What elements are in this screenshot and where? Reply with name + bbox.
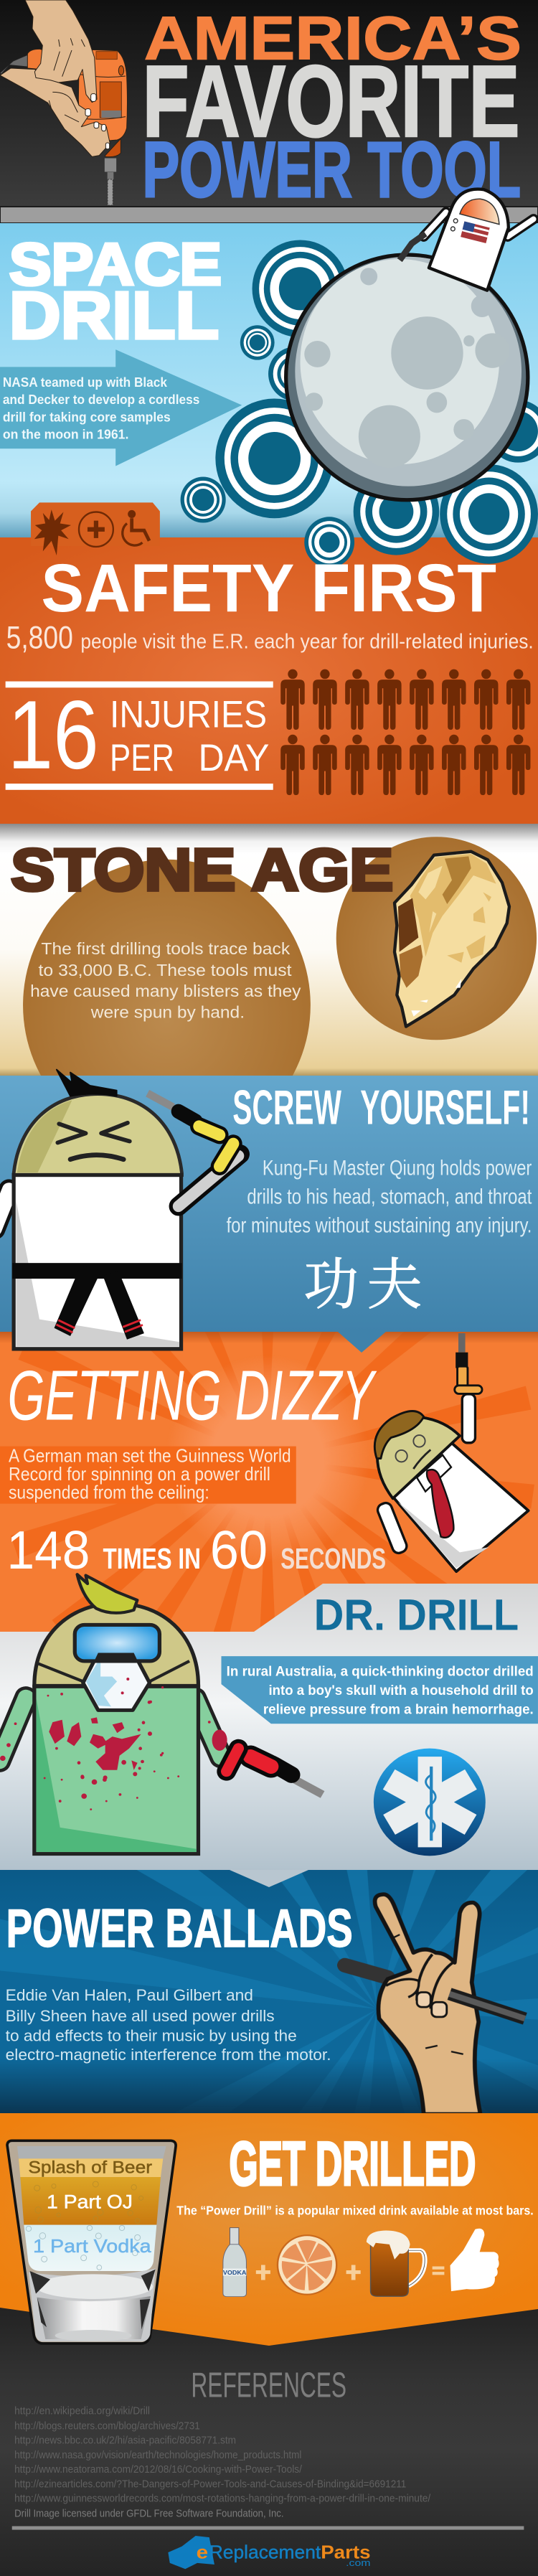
- references: http://blogs.reuters.com/blog/archives/2731: [14, 2420, 200, 2432]
- references: [12, 2366, 524, 2530]
- screw yourself text: 夫: [367, 1240, 422, 1320]
- logo: eReplacementParts: Replacement: [209, 2542, 321, 2562]
- pointer into power ballads: [230, 1870, 308, 1887]
- arrow with NASA text: NASA teamed up with Black: [3, 375, 168, 390]
- getting dizzy text: A German man set the Guinness World: [9, 1444, 291, 1466]
- power ballads text: Eddie Van Halen, Paul Gilbert and: [6, 1986, 253, 2004]
- icon: wheelchair: [123, 512, 149, 545]
- logo: eReplacementParts: Parts: [321, 2542, 371, 2562]
- red drill: [227, 1749, 323, 1795]
- screw yourself text: [227, 1081, 532, 1320]
- callout: dr drill text: [222, 1656, 538, 1724]
- safety first text and stats: 16: [8, 680, 99, 789]
- panel: header background: [0, 0, 538, 207]
- arrow with NASA text: [0, 349, 242, 466]
- references: http://www.nasa.gov/vision/earth/technologies/home_products.html: [14, 2449, 301, 2461]
- dr drill heading: DR. DRILL: [314, 1590, 519, 1640]
- illustration: shot glass recipe: [7, 2140, 176, 2344]
- illustration: rock hand holding drill bit: [345, 1894, 525, 2114]
- getting dizzy text: Record for spinning on a power drill: [9, 1463, 270, 1485]
- getting dizzy text: suspended from the ceiling:: [9, 1481, 209, 1503]
- icon: plus: [346, 2265, 361, 2280]
- panel: safety first background: [0, 537, 538, 824]
- heading: space drill: DRILL: [9, 278, 219, 353]
- illustration: spinning man: [374, 1333, 529, 1571]
- icon: star of life: [374, 1749, 486, 1856]
- logo: eReplacementParts: e: [197, 2542, 208, 2562]
- illustration: shot glass recipe: Splash of Beer: [28, 2158, 152, 2177]
- illustration: shot glass recipe: 1 Part OJ: [47, 2191, 133, 2213]
- panel: dr. drill background: [0, 1584, 538, 1870]
- icon: starburst: [34, 509, 71, 555]
- icon: plus in circle: [79, 512, 113, 547]
- illustration: moon: [284, 253, 529, 502]
- screw yourself text: 功: [303, 1240, 359, 1320]
- icon: hands holding orange drill: [0, 0, 127, 205]
- heading: space drill: [9, 232, 222, 353]
- big brown circle: [23, 860, 311, 1076]
- logo: eReplacementParts: .com: [346, 2558, 371, 2568]
- safety first text and stats: INJURIES: [110, 693, 267, 736]
- references: Drill Image licensed under GFDL Free Software Foundation, Inc.: [14, 2507, 284, 2519]
- safety first text and stats: [6, 550, 534, 790]
- panel: screw yourself background: [0, 1076, 538, 1353]
- references: REFERENCES: [191, 2366, 346, 2405]
- panel: get drilled background: [0, 2113, 538, 2346]
- blood splatter: [0, 1678, 227, 1810]
- getting dizzy text: 148: [7, 1520, 90, 1580]
- get drilled text: [176, 2128, 534, 2218]
- icon: equals: [433, 2268, 444, 2273]
- pointer: [338, 1332, 386, 1353]
- heading: space drill: SPACE: [9, 232, 222, 298]
- references: http://www.guinnessworldrecords.com/most-rotations-hanging-from-a-power-drill-in-one-minute/: [14, 2492, 431, 2504]
- power ballads text: to add effects to their music by using the: [6, 2027, 297, 2044]
- arrow with NASA text: on the moon in 1961.: [3, 427, 128, 442]
- grey band: [0, 207, 538, 223]
- stone age text: The first drilling tools trace back: [41, 939, 291, 958]
- panel: space drill background: [0, 223, 538, 538]
- getting dizzy text: GETTING DIZZY: [8, 1356, 377, 1434]
- references: http://www.neatorama.com/2012/08/16/Cooking-with-Power-Tools/: [14, 2463, 302, 2476]
- heading: stone age: STONE AGE: [11, 837, 393, 903]
- chart: pictogram of 16 people: [280, 669, 530, 795]
- power ballads text: electro-magnetic interference from the motor.: [6, 2046, 331, 2064]
- icon: beer mug: [367, 2230, 425, 2296]
- icon: orange slice: [278, 2235, 336, 2295]
- power ballads text: Billy Sheen have all used power drills: [6, 2007, 275, 2025]
- title: [142, 4, 522, 213]
- power ballads text: [6, 1899, 353, 2064]
- logo: eReplacementParts: [168, 2536, 371, 2569]
- stone age text: [30, 939, 301, 1021]
- getting dizzy text: 60: [210, 1520, 268, 1580]
- illustration: stone tool: [395, 852, 509, 1027]
- getting dizzy text: TIMES IN: [103, 1542, 201, 1575]
- arrow with NASA text: and Decker to develop a cordless: [3, 392, 199, 407]
- getting dizzy text: [0, 1356, 386, 1580]
- icon: vodka bottle: [223, 2228, 247, 2297]
- decorative circles over safety edge: [304, 464, 538, 568]
- icon: vodka bottle: VODKA: [223, 2269, 247, 2276]
- title: AMERICA’S: [144, 4, 522, 73]
- power ballads text: POWER BALLADS: [6, 1899, 353, 1959]
- right brown circle: [336, 837, 537, 1040]
- icon: plus: [256, 2265, 270, 2280]
- references: http://en.wikipedia.org/wiki/Drill: [14, 2405, 150, 2417]
- illustration: bloody doctor: [0, 1574, 323, 1854]
- arrow with NASA text: drill for taking core samples: [3, 409, 171, 424]
- panel: stone age: [0, 824, 538, 1076]
- getting dizzy text: SECONDS: [280, 1542, 386, 1575]
- icon: thumbs up: [450, 2229, 499, 2291]
- references: http://ezinearticles.com/?The-Dangers-of-Power-Tools-and-Causes-of-Binding&id=6691211: [14, 2478, 406, 2490]
- tab with safety icons: [31, 502, 160, 555]
- safety first text and stats: DAY: [198, 737, 269, 779]
- panel: references background: [0, 2296, 538, 2576]
- decorative circles behind moon: [181, 240, 538, 523]
- illustration: shot glass recipe: 1 Part Vodka: [33, 2235, 151, 2257]
- safety first text and stats: 5,800: [6, 620, 73, 656]
- safety first text and stats: PER: [110, 737, 174, 779]
- illustration: kung fu master: [0, 1070, 240, 1349]
- stone age text: to 33,000 B.C. These tools must: [39, 961, 292, 979]
- stone age text: have caused many blisters as they: [30, 982, 301, 1000]
- panel: getting dizzy background with rays: [0, 1332, 538, 1632]
- stone age text: were spun by hand.: [90, 1002, 245, 1021]
- references: http://news.bbc.co.uk/2/hi/asia-pacific/8058771.stm: [14, 2435, 236, 2446]
- panel: power ballads background with rays: [0, 1870, 538, 2113]
- safety first text and stats: SAFETY FIRST: [41, 550, 496, 626]
- illustration: astronaut: [400, 189, 534, 291]
- illustration: drink equation: [223, 2228, 499, 2297]
- screw yourself text: SCREW: [232, 1081, 341, 1134]
